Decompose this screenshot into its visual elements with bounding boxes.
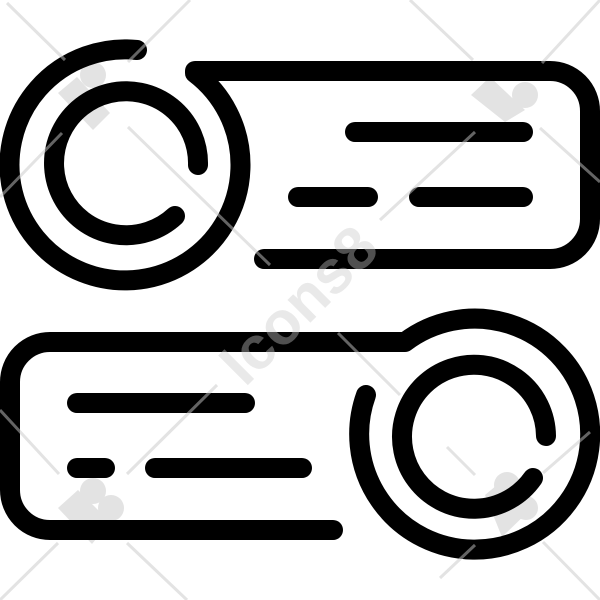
icon: bottom speech panel with rings <box>10 319 590 550</box>
watermark logo: bottom right <box>485 472 538 537</box>
bottom bubble text lines <box>77 403 302 468</box>
bottom bubble outline and outer ring <box>10 319 590 550</box>
icon: top speech panel with rings <box>10 49 590 280</box>
watermark logo: top right <box>471 77 538 122</box>
top bubble text lines <box>298 132 523 197</box>
watermark logo: top left <box>58 62 110 130</box>
watermark text: Icons8 <box>206 212 391 397</box>
outer ring and top bubble outline <box>10 49 590 280</box>
inner ring <box>54 91 198 235</box>
watermark logo: bottom left <box>58 478 124 544</box>
inner ring <box>402 365 546 509</box>
